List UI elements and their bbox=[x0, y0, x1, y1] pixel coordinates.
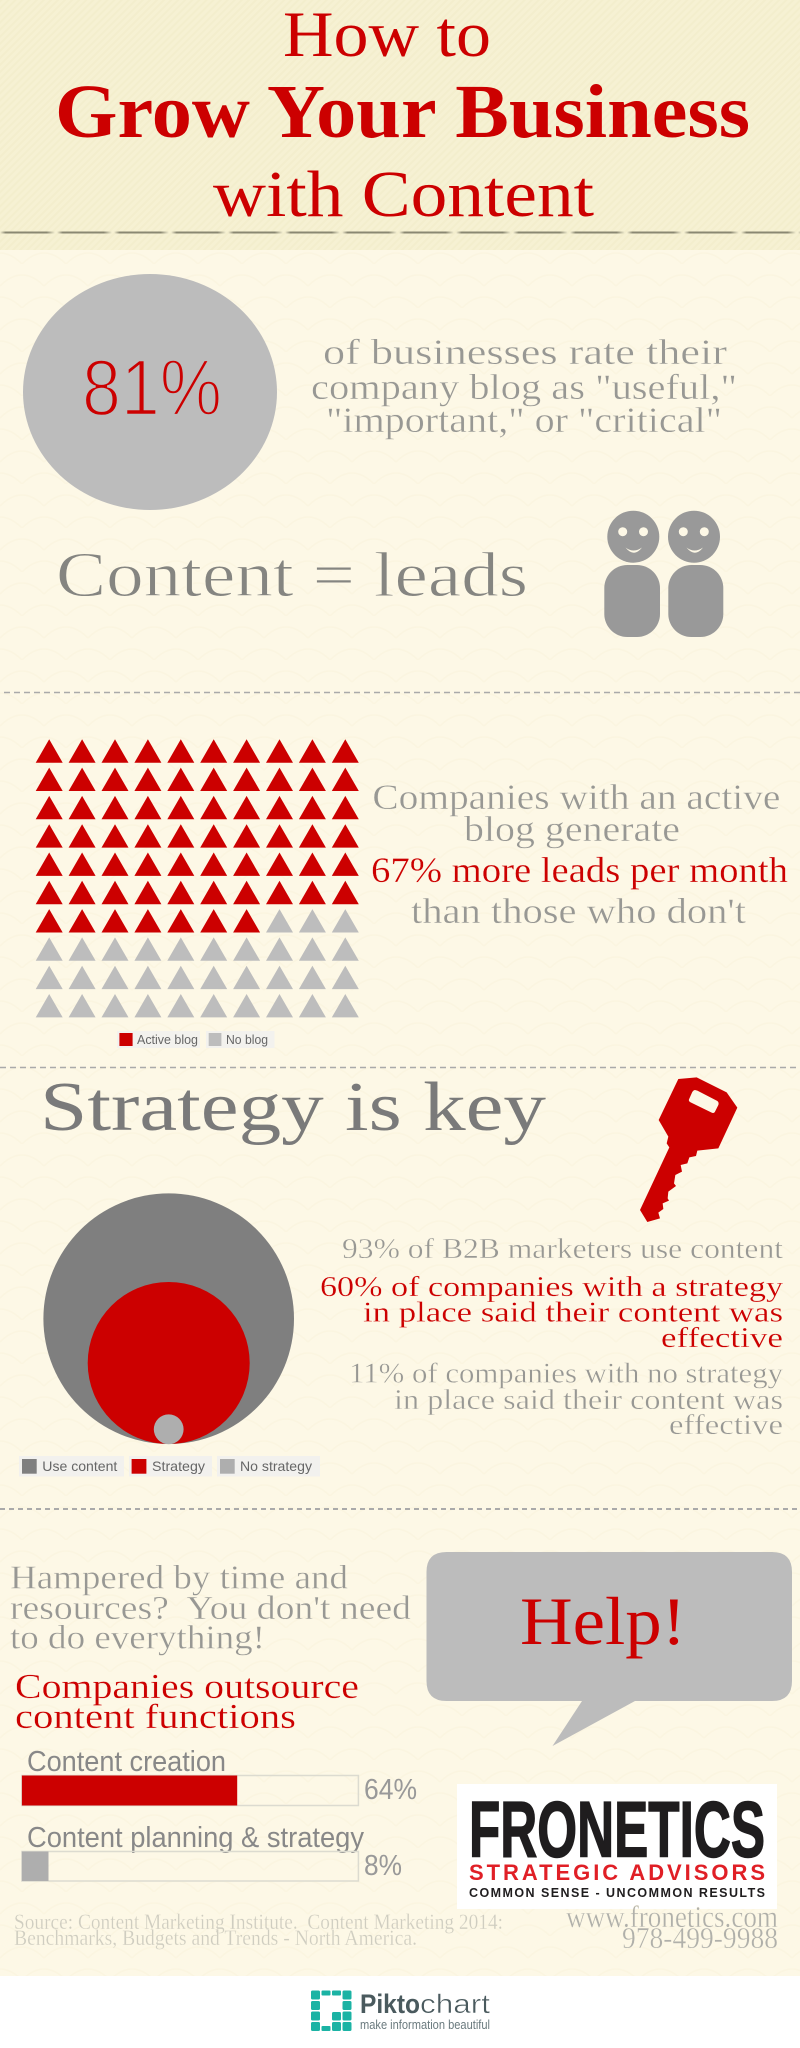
heading: companies outsource: Companies outsource bbox=[15, 1667, 359, 1706]
circle with 81% bbox=[23, 274, 277, 510]
statistic: 11% effective without strategy bbox=[349, 1358, 784, 1441]
logo: Fronetics: COMMON SENSE - UNCOMMON RESULTS bbox=[469, 1886, 765, 1900]
legend: active blog / no blog: No blog bbox=[226, 1032, 268, 1047]
leads statistic text: blog generate bbox=[464, 809, 680, 849]
bar: content planning and strategy 8%: 8% bbox=[364, 1850, 402, 1882]
icon: two smiling people bbox=[604, 511, 723, 637]
leads statistic text: 67% more leads per month bbox=[371, 850, 788, 890]
heading: companies outsource bbox=[15, 1667, 359, 1736]
statistic description: of businesses rate their bbox=[323, 332, 727, 372]
icon: Piktochart logo bbox=[311, 1990, 352, 2031]
contact details: 978-499-9988 bbox=[622, 1920, 778, 1955]
legend: use content / strategy / no strategy: Strategy bbox=[152, 1458, 205, 1474]
bar: content planning and strategy 8% bbox=[22, 1822, 402, 1882]
legend: use content / strategy / no strategy: Use content bbox=[42, 1458, 117, 1474]
wordmark: Piktochart: chart bbox=[420, 1989, 491, 2019]
statistic: 60% effective with strategy bbox=[320, 1271, 784, 1354]
statistic: 11% effective without strategy: in place said their content was bbox=[394, 1384, 783, 1416]
title line: Grow Your Business: Grow Your Business bbox=[55, 70, 750, 154]
triangle pictogram chart: 67 of 100 bbox=[36, 739, 359, 1017]
bar: content creation 64%: 64% bbox=[364, 1774, 417, 1806]
heading: Content = leads: Content = leads bbox=[56, 539, 528, 610]
circle with 81%: 81% bbox=[82, 343, 222, 432]
legend: use content / strategy / no strategy: No strategy bbox=[240, 1458, 312, 1474]
statistic: 11% effective without strategy: 11% of companies with no strategy bbox=[349, 1358, 784, 1390]
source text: Source: Content Marketing Institute. Content Marketing 2014: bbox=[14, 1909, 503, 1934]
red triangles: active blog bbox=[36, 739, 359, 932]
statistic: 60% effective with strategy: effective bbox=[661, 1322, 783, 1354]
intro text bbox=[10, 1559, 411, 1656]
legend: active blog / no blog bbox=[117, 1031, 274, 1048]
bar: content creation 64%: Content creation bbox=[27, 1746, 226, 1778]
statistic: 11% effective without strategy: effective bbox=[669, 1409, 783, 1441]
panel: blog usefulness statistic bbox=[23, 274, 737, 637]
legend: use content / strategy / no strategy bbox=[19, 1456, 320, 1476]
statistic description: "important," or "critical" bbox=[326, 400, 722, 440]
nested circle chart bbox=[43, 1193, 294, 1444]
speech bubble: Help! bbox=[426, 1552, 792, 1746]
statistic description: company blog as "useful," bbox=[311, 367, 737, 407]
logo: Fronetics bbox=[457, 1784, 777, 1909]
title line: How to: How to bbox=[283, 0, 491, 71]
source text bbox=[14, 1909, 503, 1950]
leads statistic text bbox=[371, 777, 788, 931]
intro text: resources? You don't need bbox=[10, 1590, 411, 1627]
bar: content creation 64% bbox=[22, 1746, 417, 1806]
panel: active blog leads bbox=[36, 739, 788, 1048]
intro text: Hampered by time and bbox=[10, 1559, 348, 1596]
icon: red key bbox=[640, 1077, 737, 1222]
footer: Piktochart bbox=[0, 1976, 800, 2048]
leads statistic text: Companies with an active bbox=[372, 777, 780, 817]
statistic: 60% effective with strategy: in place said their content was bbox=[363, 1297, 783, 1329]
wordmark: Piktochart bbox=[360, 1989, 491, 2032]
panel: outsourcing bbox=[10, 1552, 792, 1955]
panel: title header bbox=[0, 0, 800, 250]
logo: Fronetics: STRATEGIC ADVISORS bbox=[469, 1860, 765, 1885]
source text: Benchmarks, Budgets and Trends - North America. bbox=[14, 1925, 417, 1950]
gray triangles: no blog bbox=[36, 909, 359, 1017]
title line: with Content: with Content bbox=[213, 158, 594, 231]
wordmark: Piktochart: Pikto bbox=[360, 1989, 420, 2019]
legend: active blog / no blog: Active blog bbox=[137, 1032, 198, 1047]
bar: content planning and strategy 8%: Content planning & strategy bbox=[27, 1822, 364, 1854]
statistic: 93% use content: 93% of B2B marketers use content bbox=[342, 1233, 783, 1265]
leads statistic text: than those who don't bbox=[411, 891, 746, 931]
speech bubble: Help!: Help! bbox=[520, 1583, 686, 1659]
statistic: 60% effective with strategy: 60% of companies with a strategy bbox=[320, 1271, 784, 1303]
contact details bbox=[566, 1899, 778, 1955]
wordmark: Piktochart: make information beautiful bbox=[360, 2018, 490, 2032]
heading: Strategy is key: Strategy is key bbox=[40, 1069, 546, 1146]
intro text: to do everything! bbox=[10, 1620, 265, 1656]
panel: strategy is key bbox=[19, 1069, 784, 1476]
heading: companies outsource: content functions bbox=[15, 1697, 296, 1736]
statistic description bbox=[311, 332, 737, 440]
